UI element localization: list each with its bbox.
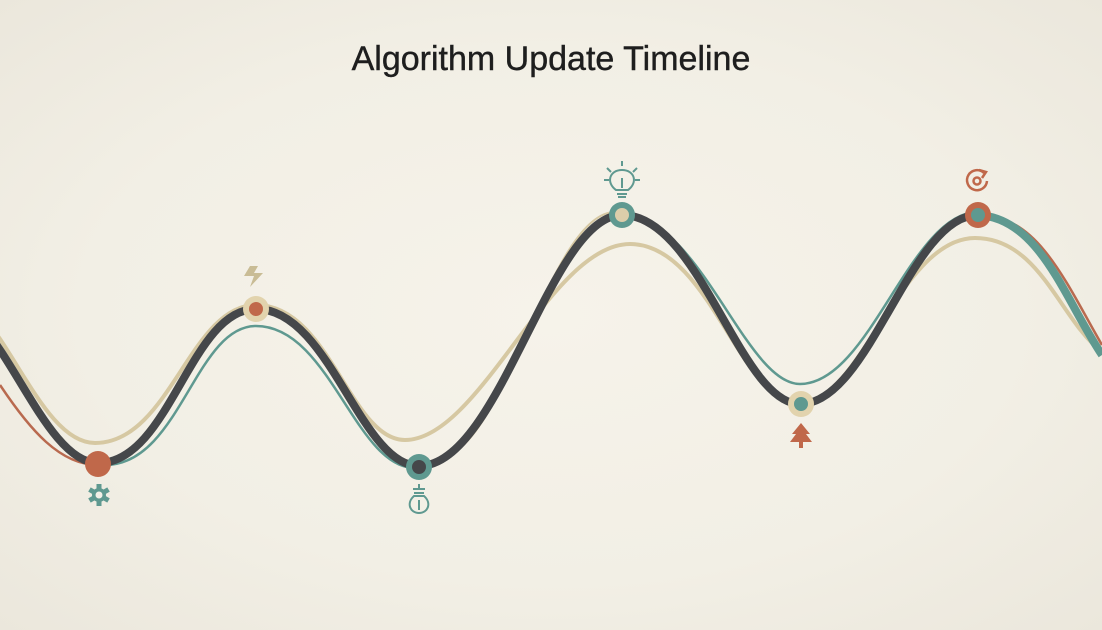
dark main line bbox=[0, 215, 978, 466]
title: Algorithm Update Timeline bbox=[352, 40, 750, 78]
teal thick right bbox=[978, 215, 1102, 355]
node 2 bbox=[243, 296, 269, 322]
teal line bbox=[105, 212, 978, 468]
icon: refresh bbox=[967, 170, 987, 190]
node 5 bbox=[788, 391, 814, 417]
node 4 bbox=[609, 202, 635, 228]
node 3 bbox=[406, 454, 432, 480]
tan line bbox=[0, 238, 1102, 443]
icon: tree bbox=[790, 423, 812, 448]
icon: gear bbox=[88, 484, 110, 506]
tan thin upper branch bbox=[440, 212, 615, 458]
node 6 bbox=[965, 202, 991, 228]
icon: bulb top with rays bbox=[604, 161, 640, 197]
icon: lightning bbox=[244, 266, 263, 287]
node 1 bbox=[85, 451, 111, 477]
red line bbox=[0, 385, 98, 465]
icon: bulb bottom bbox=[410, 484, 428, 513]
